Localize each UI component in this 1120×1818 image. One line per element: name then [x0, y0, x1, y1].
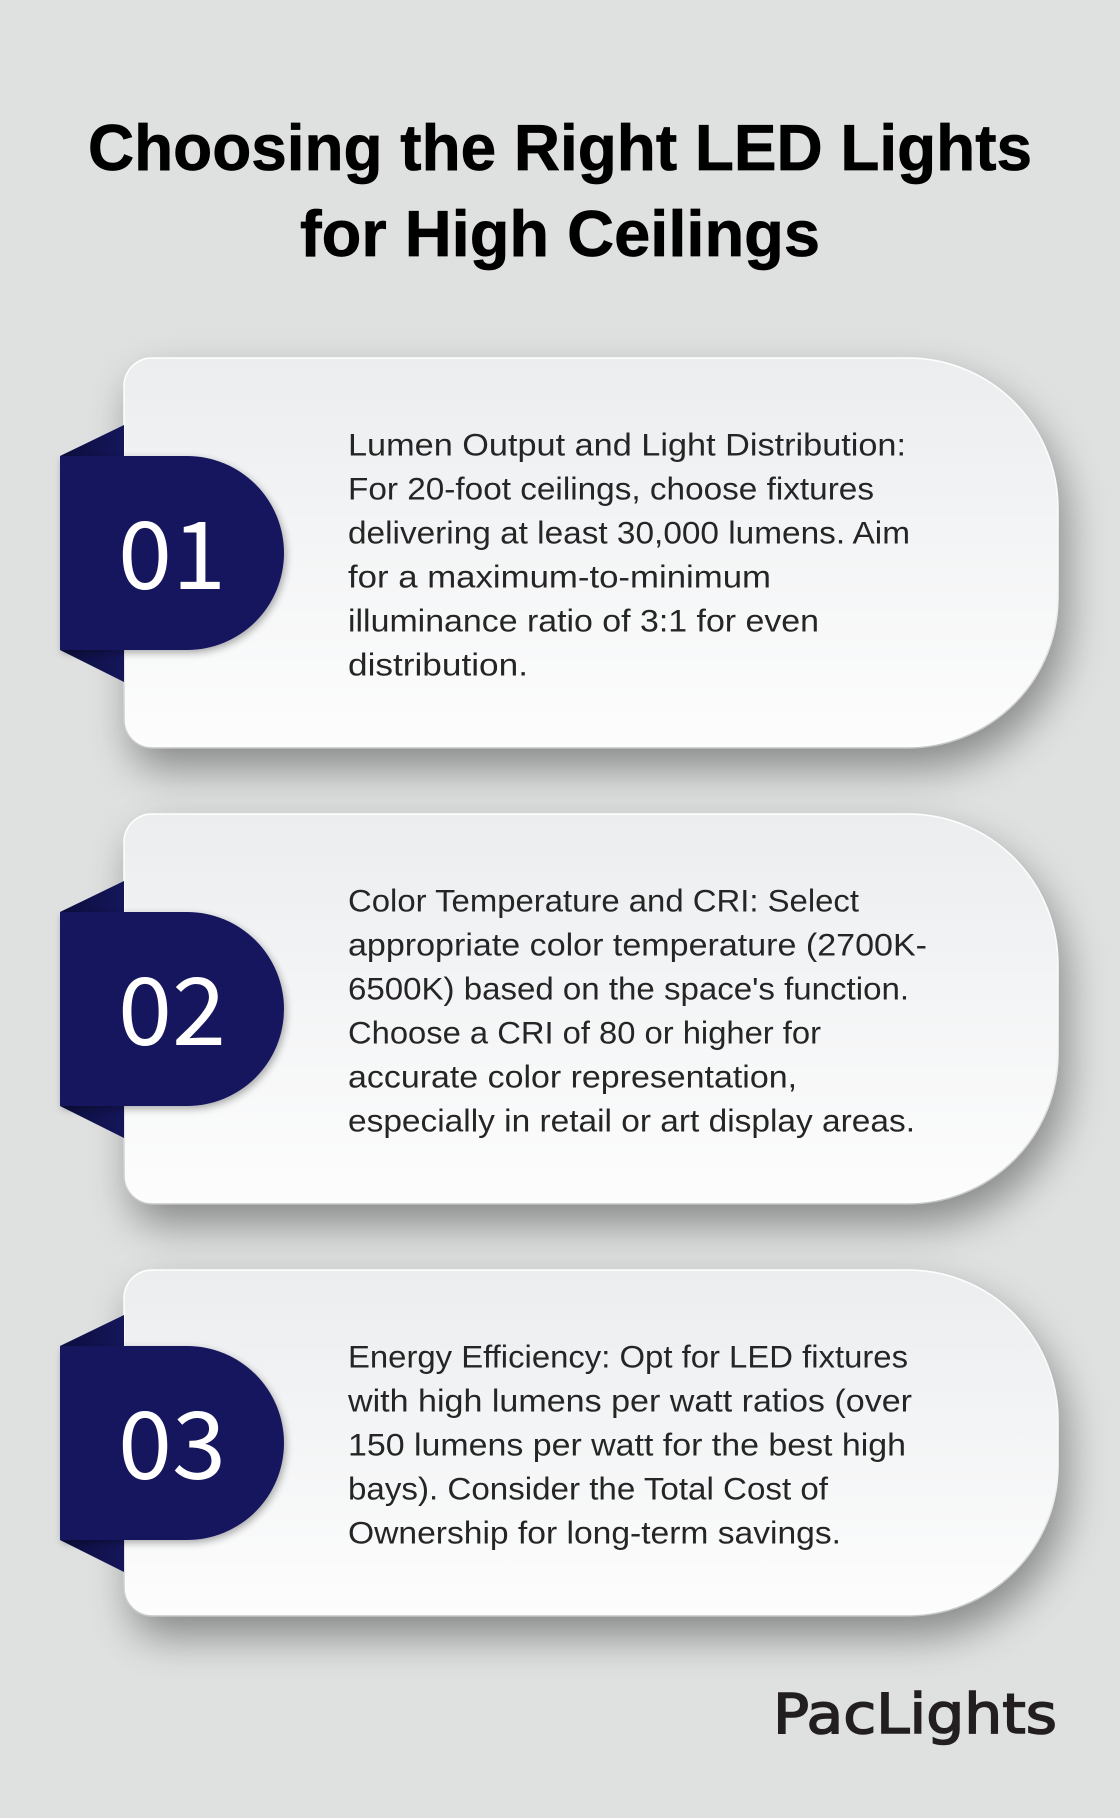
- text block 02: [348, 883, 927, 1139]
- number badge 01: [60, 425, 284, 682]
- number badge 01: 01: [118, 481, 226, 617]
- number badge 02: 02: [118, 937, 226, 1073]
- title: Choosing the Right LED Lights: [88, 111, 1032, 184]
- text block 01: distribution.: [348, 647, 528, 683]
- text block 01: Lumen Output and Light Distribution:: [348, 427, 906, 463]
- text block 03: bays). Consider the Total Cost of: [348, 1471, 828, 1507]
- panel: step 01: [60, 358, 1058, 748]
- text block 02: 6500K) based on the space's function.: [348, 971, 909, 1007]
- text block 02: Color Temperature and CRI: Select: [348, 883, 859, 919]
- panel: step 02: [60, 814, 1058, 1204]
- card background 01: [124, 358, 1058, 748]
- text block 02: Choose a CRI of 80 or higher for: [348, 1015, 821, 1051]
- text block 02: accurate color representation,: [348, 1059, 797, 1095]
- title: [88, 111, 1032, 270]
- text block 01: illuminance ratio of 3:1 for even: [348, 603, 819, 639]
- text block 01: for a maximum-to-minimum: [348, 559, 771, 595]
- number badge 03: 03: [118, 1371, 226, 1507]
- card background 02: [124, 814, 1058, 1204]
- text block 01: [348, 427, 910, 683]
- text block 03: Ownership for long-term savings.: [348, 1515, 841, 1551]
- text block 01: delivering at least 30,000 lumens. Aim: [348, 515, 910, 551]
- text block 03: 150 lumens per watt for the best high: [348, 1427, 906, 1463]
- text block 03: [347, 1339, 912, 1551]
- text block 03: with high lumens per watt ratios (over: [347, 1383, 912, 1419]
- text block 03: Energy Efficiency: Opt for LED fixtures: [348, 1339, 908, 1375]
- panel: step 03: [60, 1270, 1058, 1616]
- text block 01: For 20-foot ceilings, choose fixtures: [348, 471, 874, 507]
- number badge 02: [60, 881, 284, 1138]
- card background 03: [124, 1270, 1058, 1616]
- text block 02: appropriate color temperature (2700K-: [348, 927, 927, 963]
- title: for High Ceilings: [300, 197, 820, 270]
- text block 02: especially in retail or art display areas.: [348, 1103, 915, 1139]
- logo: PacLights: PacLights: [773, 1682, 1057, 1746]
- number badge 03: [60, 1315, 284, 1572]
